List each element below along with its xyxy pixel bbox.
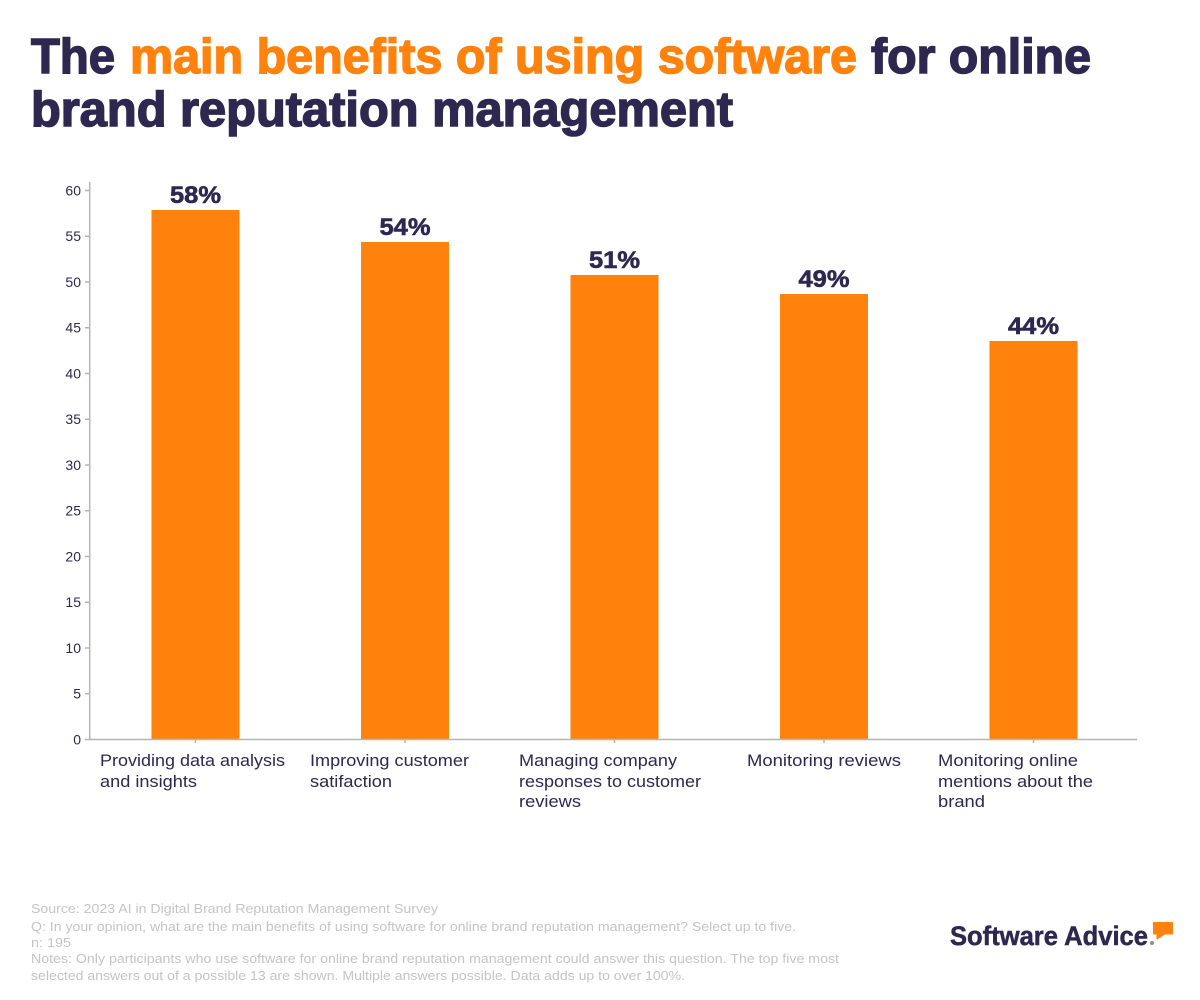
category labels: Monitoring reviews [747,751,901,770]
bar: 54%: 54% [380,214,430,241]
category labels: brand [938,792,985,811]
category labels [100,751,1093,811]
category labels: satifaction [310,772,392,791]
source notes: Q: In your opinion, what are the main benefits of using software for online brand reputation management? Select up to five. [31,919,796,934]
title: main benefits of using software [130,30,857,84]
source notes: selected answers out of a possible 13 are shown. Multiple answers possible. Data adds up to over 100%. [31,968,685,983]
y axis: 55 [65,228,81,244]
y axis: 60 [65,182,81,198]
y axis: 15 [65,594,81,610]
title [31,30,1091,137]
bar: 58%: 58% [170,182,221,209]
category labels: reviews [519,792,581,811]
title: brand reputation management [31,83,733,137]
y axis: 0 [73,732,81,748]
bar: 49% [780,266,868,739]
y axis [65,182,90,748]
y axis: 50 [65,274,81,290]
title: for online [871,30,1091,84]
source notes: n: 195 [31,935,71,950]
category labels: Managing company [519,751,678,770]
source notes: Notes: Only participants who use software for online brand reputation management could answer this question. The top five most [31,951,839,966]
title: The [31,30,115,84]
bar chart [65,182,1137,811]
bar: 44% [990,313,1078,739]
bar: 51% [570,247,658,739]
logo: Software Advice: Software Advice [950,921,1148,951]
bar: 54% [361,214,449,739]
category labels: Providing data analysis [100,751,285,770]
source notes: Source: 2023 AI in Digital Brand Reputation Management Survey [31,901,439,916]
category labels: Monitoring online [938,751,1078,770]
category labels: responses to customer [519,772,701,791]
y axis: 20 [65,548,81,564]
category labels: Improving customer [310,751,469,770]
y axis: 30 [65,457,81,473]
y axis: 40 [65,366,81,382]
y axis: 25 [65,502,81,518]
y axis: 10 [65,640,81,656]
source notes [31,901,839,983]
y axis: 35 [65,411,81,427]
bar: 51%: 51% [589,247,640,274]
bar: 58% [152,182,240,739]
category labels: mentions about the [938,772,1093,791]
x axis [89,740,1137,743]
y axis: 5 [73,686,81,702]
y axis: 45 [65,320,81,336]
category labels: and insights [100,772,197,791]
bar: 44%: 44% [1008,313,1059,340]
bar: 49%: 49% [798,266,850,293]
icon: speech bubble [1154,922,1172,939]
